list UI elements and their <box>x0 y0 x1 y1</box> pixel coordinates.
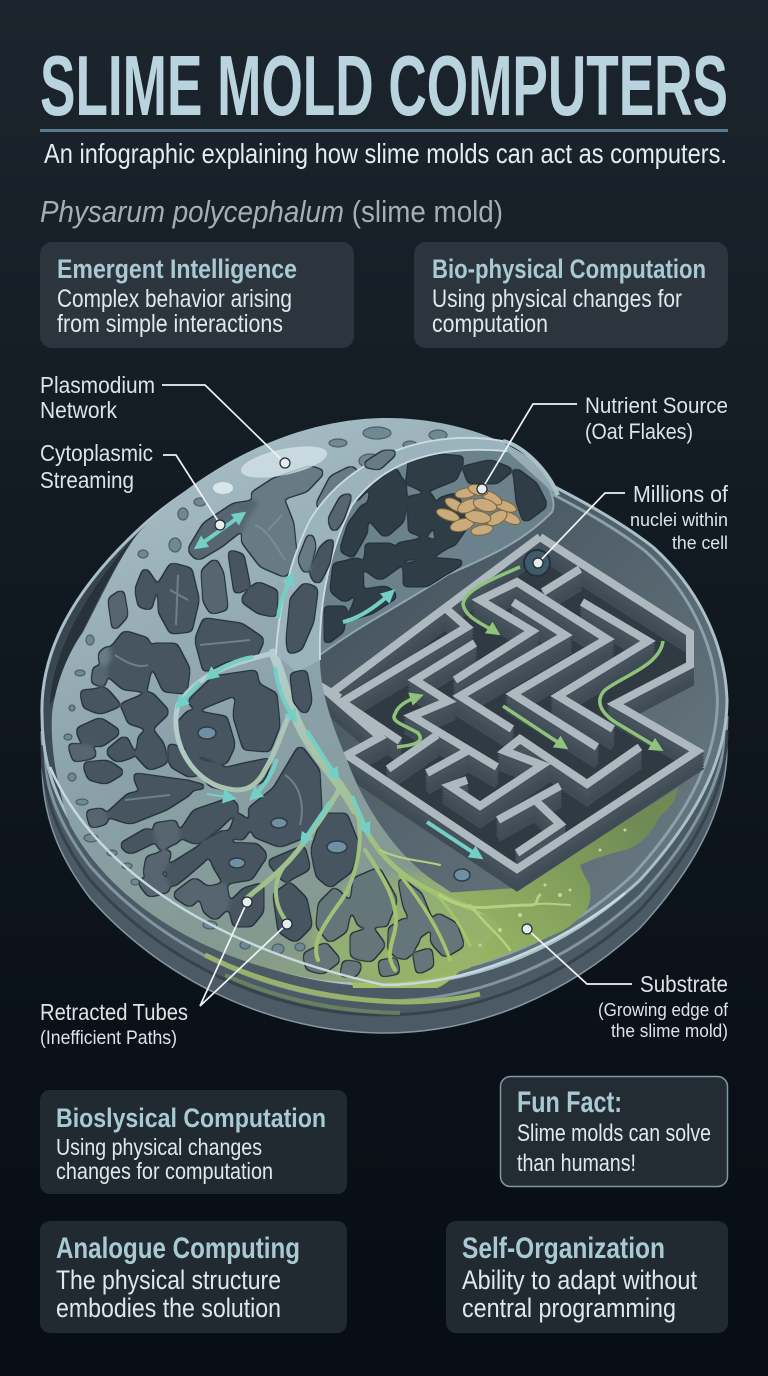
nucleus in maze <box>524 550 550 576</box>
anchor dot <box>477 484 487 494</box>
sublabel: (Inefficient Paths) <box>40 1028 177 1049</box>
edge bubbles <box>64 427 447 954</box>
dish floor <box>42 429 727 985</box>
leader line <box>527 929 632 984</box>
leader line <box>482 404 577 489</box>
sublabel: the cell <box>672 533 728 553</box>
dome lip <box>503 441 558 495</box>
body text: central programming <box>462 1293 676 1323</box>
sublabel: the slime mold) <box>611 1021 728 1041</box>
label: Streaming <box>40 467 134 493</box>
dish inner rim <box>384 492 717 977</box>
arrow: double-headed cytoplasmic stream <box>197 514 243 547</box>
fold band of the dome <box>276 438 507 672</box>
species name: Physarum polycephalum (slime mold) <box>40 194 503 229</box>
anchor dot <box>215 520 225 530</box>
heading: Bioslysical Computation <box>56 1103 326 1133</box>
panel: biosylsical computation <box>40 1090 347 1194</box>
tree of tubes <box>176 653 510 970</box>
label: Substrate <box>640 971 728 997</box>
panel: bio-physical computation <box>414 242 728 348</box>
arrow: stream up to the fold <box>278 575 292 618</box>
body text: Ability to adapt without <box>462 1265 697 1295</box>
sublabel: nuclei within <box>630 510 728 530</box>
arrow: green path in maze top <box>463 567 520 633</box>
body text: computation <box>432 310 548 338</box>
heading: Analogue Computing <box>56 1232 300 1265</box>
label: Network <box>40 397 117 423</box>
dish front rim highlight <box>50 767 625 985</box>
cutaway pocket with inner network <box>320 450 554 655</box>
label: Plasmodium <box>40 372 155 398</box>
arrow: thin stream <box>207 794 233 798</box>
nucleus on floor <box>454 869 470 881</box>
panel: emergent intelligence <box>40 242 354 348</box>
body text: Using physical changes for <box>432 285 682 313</box>
arrow: teal flow beside maze <box>427 822 480 857</box>
anchor dot <box>533 558 543 568</box>
arrow: green path in maze left <box>394 696 420 747</box>
heading: Fun Fact: <box>517 1086 622 1119</box>
body text: changes for computation <box>56 1158 273 1184</box>
callout: substrate <box>522 924 729 1041</box>
body text: from simple interactions <box>57 310 283 338</box>
green branches on substrate <box>380 850 570 950</box>
anchor dot <box>522 924 532 934</box>
anchor dot <box>282 919 292 929</box>
callout: cytoplasmic streaming <box>40 440 225 530</box>
arrow: branch stream right <box>352 796 368 833</box>
leader line <box>538 493 625 563</box>
illustration: petri dish with slime mold and maze <box>42 418 727 1033</box>
dark crescent behind dome <box>50 536 135 705</box>
callout: retracted tubes <box>40 897 292 1049</box>
arrow: trunk stream <box>275 667 295 720</box>
leader lines <box>200 902 287 1006</box>
anchor dot <box>242 897 252 907</box>
leader line <box>163 455 220 524</box>
plasmodium network dome <box>52 418 558 985</box>
nutrient source: oat flakes <box>435 483 522 537</box>
arrow: trunk stream lower <box>307 731 337 778</box>
panel: self-organization <box>446 1221 728 1333</box>
label: Cytoplasmic <box>40 440 153 466</box>
arrow: loop stream <box>252 759 277 798</box>
cell veins <box>115 515 302 825</box>
body text: embodies the solution <box>56 1293 281 1323</box>
network highlights <box>241 446 327 478</box>
label: Nutrient Source <box>585 393 728 418</box>
callout: plasmodium network <box>40 372 290 468</box>
dish outer wall <box>42 477 727 1033</box>
panel: fun fact <box>500 1076 728 1186</box>
body text: than humans! <box>517 1150 636 1177</box>
leader line <box>162 385 285 463</box>
label: Millions of <box>633 481 729 507</box>
arrow: branch stream left <box>302 802 330 843</box>
label: Retracted Tubes <box>40 999 188 1025</box>
title rule <box>40 129 728 132</box>
body text: The physical structure <box>56 1265 281 1295</box>
callout: nutrient source <box>477 393 728 494</box>
callout: millions of nuclei <box>533 481 729 568</box>
arrow: teal flow into pocket <box>343 592 392 622</box>
fold band cells <box>288 452 395 712</box>
arrow: stream into loop <box>178 682 200 706</box>
heading: Bio-physical Computation <box>432 254 706 284</box>
maze <box>320 537 697 887</box>
arrow: stream into left branch <box>208 657 253 678</box>
body text: Using physical changes <box>56 1134 262 1160</box>
network base <box>52 418 558 983</box>
heading: Emergent Intelligence <box>57 254 297 284</box>
network cells <box>70 468 462 975</box>
body text: Slime molds can solve <box>517 1120 711 1147</box>
arrow: green path in maze centre <box>503 706 565 747</box>
sublabel: (Growing edge of <box>598 1000 729 1020</box>
heading: Self-Organization <box>462 1232 665 1265</box>
substrate: green slime on the dish floor <box>340 788 678 988</box>
label: (Oat Flakes) <box>585 419 693 444</box>
arrow: green path in maze right <box>600 641 663 749</box>
substrate specks <box>478 828 626 946</box>
network nuclei <box>198 727 347 868</box>
anchor dot <box>280 458 290 468</box>
panel: analogue computing <box>40 1221 347 1333</box>
body text: Complex behavior arising <box>57 285 292 313</box>
